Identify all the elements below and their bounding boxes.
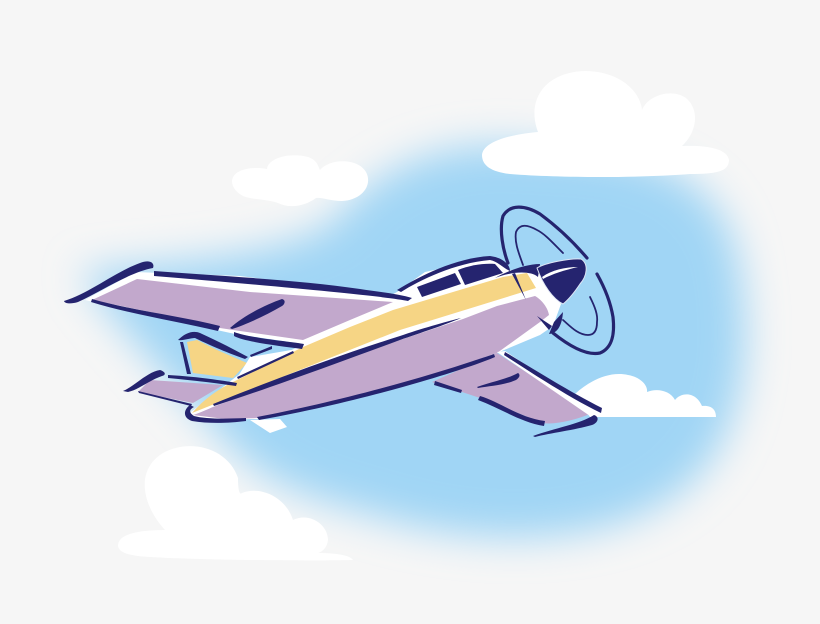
cowl vertical line (512, 273, 526, 300)
airplane (64, 207, 614, 437)
canopy top outline (397, 256, 510, 292)
fuselage upper line (213, 318, 461, 406)
tailplane tip (123, 370, 165, 392)
tailplane purple (138, 380, 223, 403)
landing gear fairing (250, 419, 287, 433)
right wing leading edge (504, 352, 602, 413)
fin rear edge (180, 342, 191, 374)
tailplane top edge (168, 375, 237, 386)
right wing white edge (497, 351, 597, 416)
dark outline strokes (64, 256, 602, 437)
yellow stripe (192, 273, 536, 413)
cloud: bottom left (118, 446, 353, 560)
fin yellow (187, 340, 247, 378)
main wing trailing edge (91, 299, 220, 331)
fin root line (237, 351, 294, 379)
wing root stroke (234, 332, 304, 349)
cowl dark line (495, 264, 540, 278)
fin top stroke (178, 332, 248, 359)
sky: soft blue blob (80, 145, 745, 537)
main wing leading edge (154, 271, 412, 301)
rear window (417, 273, 461, 297)
tail bottom stroke (185, 405, 246, 423)
fin white panel (237, 349, 297, 378)
front window (458, 264, 503, 285)
propeller disc (501, 207, 614, 353)
fuselage belly (257, 354, 495, 420)
cowl lower shadow (549, 312, 563, 334)
cloud: top right (482, 71, 729, 177)
tailplane lower edge (138, 391, 192, 406)
white underlay: fuselage (186, 258, 561, 420)
spinner highlight (542, 267, 578, 279)
cloud: small upper left (232, 155, 368, 206)
main wing purple (92, 279, 393, 340)
fuselage purple (193, 296, 549, 419)
wing flap stroke (230, 299, 285, 329)
right wing purple (432, 353, 590, 423)
right wing root stroke (434, 381, 462, 393)
cloud: behind right wing (575, 374, 716, 417)
spinner (537, 259, 586, 304)
nose crease (537, 316, 552, 330)
white underlay: main wing (85, 272, 420, 345)
right wing inner stroke (477, 373, 519, 388)
main wing tip (64, 261, 153, 303)
right wing trailing edge (478, 396, 545, 426)
right wing tip (533, 415, 598, 437)
fin to fuselage stroke (250, 346, 272, 357)
